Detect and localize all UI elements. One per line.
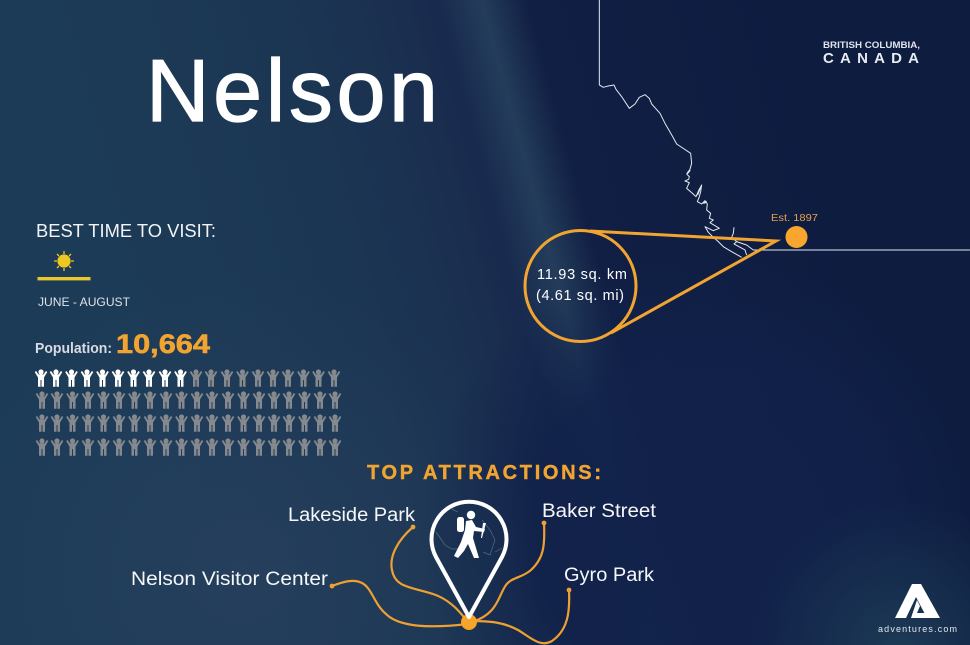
map: British Columbia outline — [599, 0, 970, 257]
established marker: Est. 1897 — [771, 212, 818, 224]
population pictogram — [35, 369, 341, 456]
established marker — [771, 212, 818, 248]
map pin with hiker — [432, 502, 507, 630]
best time to visit: BEST TIME TO VISIT: — [36, 221, 216, 241]
location label — [823, 40, 920, 67]
population: Population: — [35, 341, 112, 357]
title: Nelson — [146, 41, 438, 140]
attraction labels: Baker Street — [542, 501, 657, 522]
attraction connector lines — [330, 521, 571, 643]
area callout: (4.61 sq. mi) — [536, 288, 624, 304]
logo: adventures.com: adventures.com — [878, 624, 957, 634]
location label: BRITISH COLUMBIA, — [823, 40, 920, 51]
faint map lines — [436, 508, 502, 555]
area callout — [525, 230, 776, 342]
heading: top attractions: TOP ATTRACTIONS: — [367, 462, 601, 484]
attraction labels: Nelson Visitor Center — [131, 569, 329, 590]
attraction labels: Gyro Park — [564, 565, 655, 586]
icon: sun — [54, 251, 74, 271]
population — [35, 329, 210, 359]
best time to visit: JUNE - AUGUST — [38, 295, 131, 309]
area callout: 11.93 sq. km — [537, 267, 627, 283]
attraction labels: Lakeside Park — [288, 505, 416, 526]
population: 10,664 — [116, 329, 210, 359]
attraction labels — [131, 501, 657, 590]
icon: hiker — [454, 511, 486, 558]
best time to visit — [36, 221, 216, 309]
logo: adventures.com — [878, 584, 957, 634]
location label: CANADA — [823, 50, 919, 67]
